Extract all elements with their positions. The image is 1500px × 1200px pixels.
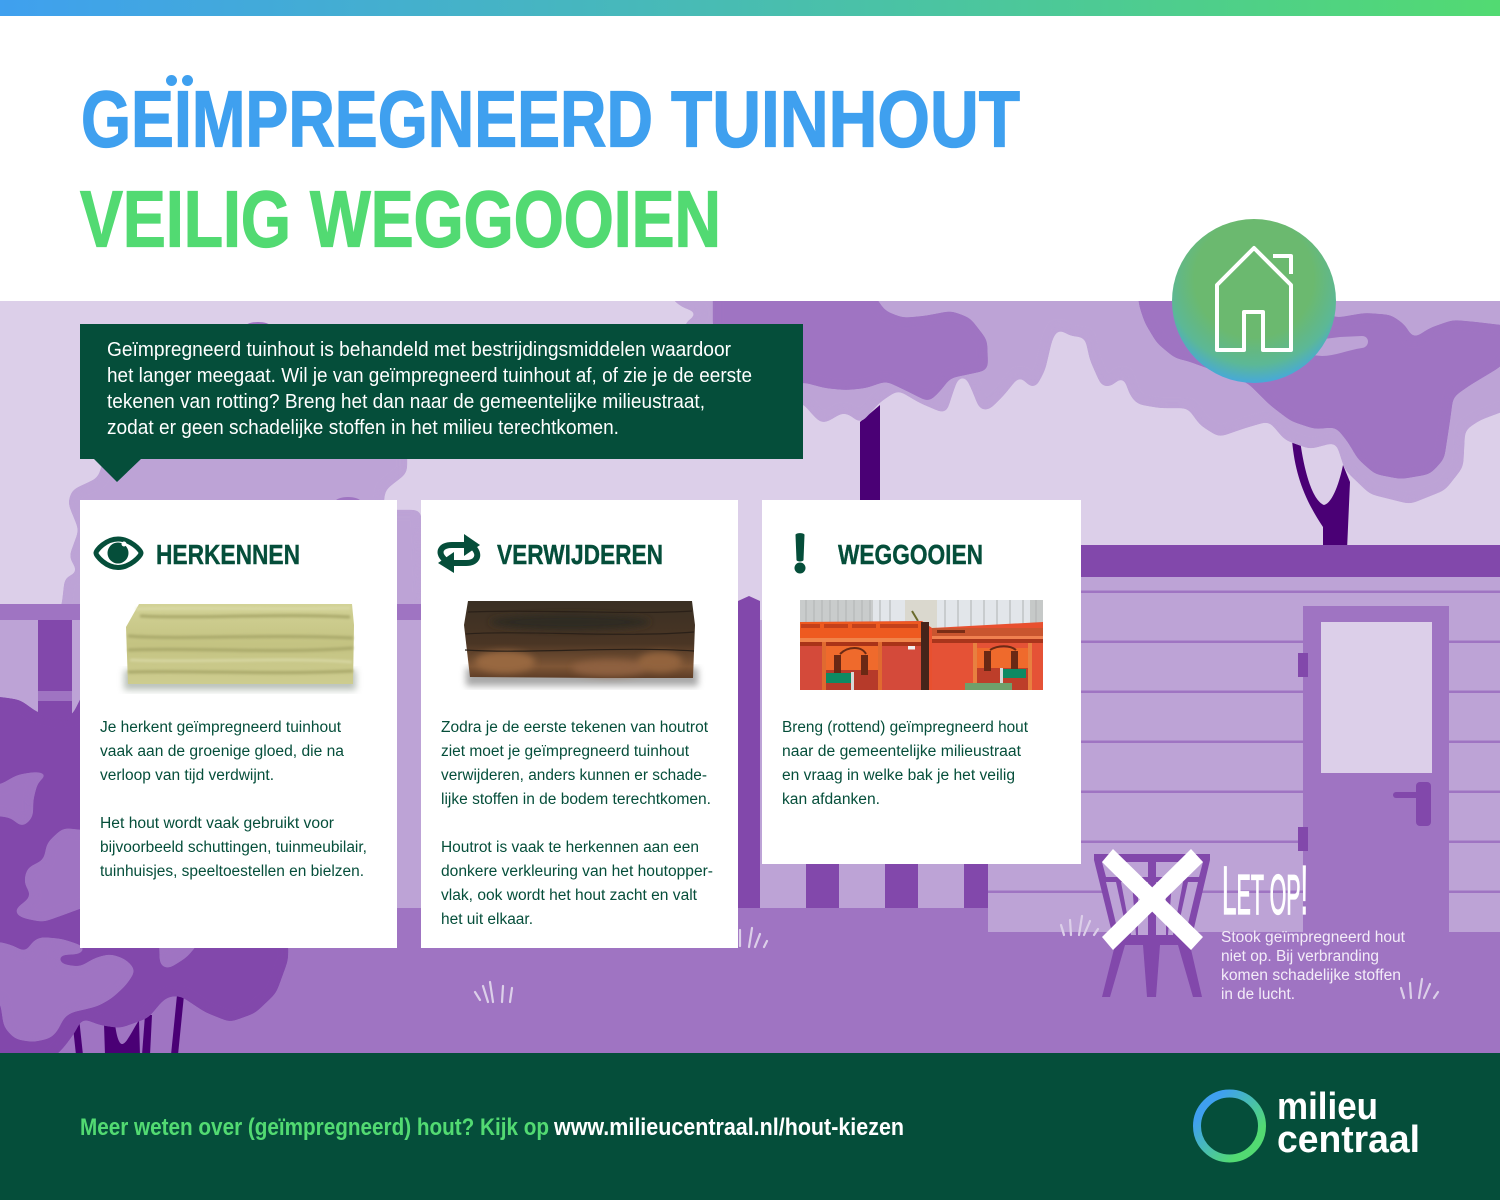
fence — [0, 596, 988, 910]
title: WEGGOOIEN — [310, 174, 721, 264]
intro callout: tekenen van rotting? Breng het dan naar de gemeentelijke milieustraat, — [107, 391, 705, 413]
footer call to action: Meer weten over (geïmpregneerd) hout? Kijk op — [80, 1114, 549, 1141]
body text: verloop van tijd verdwijnt. — [100, 767, 274, 784]
photo: rotten wood — [464, 601, 698, 686]
body text: Zodra je de eerste tekenen van houtrot — [441, 719, 709, 736]
intro callout: Geïmpregneerd tuinhout is behandeld met bestrijdingsmiddelen waardoor — [107, 339, 731, 361]
icon: eye — [96, 539, 141, 568]
intro callout: zodat er geen schadelijke stoffen in het milieu terechtkomen. — [107, 417, 619, 439]
bump behind intro box — [248, 322, 268, 324]
shed roof — [1081, 545, 1500, 577]
garden scene background — [0, 280, 1500, 1060]
panel: verwijderen — [421, 500, 738, 948]
warning text: Stook geïmpregneerd hout — [1221, 929, 1406, 946]
white cross over basket — [1102, 849, 1203, 950]
heading: VERWIJDEREN — [497, 539, 663, 570]
logo: centraal — [1277, 1119, 1420, 1161]
garden scene background: LET OP! — [1222, 851, 1308, 929]
body text: donkere verkleuring van het houtopper- — [441, 863, 713, 880]
body text: naar de gemeentelijke milieustraat — [782, 743, 1022, 760]
fire basket — [1094, 854, 1210, 997]
body text: Houtrot is vaak te herkennen aan een — [441, 839, 699, 856]
top gradient bar — [0, 0, 1500, 16]
body text — [782, 719, 1029, 808]
body text: vlak, ook wordt het hout zacht en valt — [441, 887, 698, 904]
background tree foliage — [50, 280, 1500, 640]
body text: lijke stoffen in de bodem terechtkomen. — [441, 791, 711, 808]
title — [80, 72, 1020, 264]
door — [1298, 606, 1449, 932]
grass tufts — [475, 916, 1438, 1002]
footer call to action: www.milieucentraal.nl/hout-kiezen — [553, 1114, 904, 1141]
icon: house — [1217, 248, 1291, 350]
footer — [0, 1053, 1500, 1200]
foreground tree trunks — [72, 995, 184, 1055]
body text: Het hout wordt vaak gebruikt voor — [100, 815, 334, 832]
body text: verwijderen, anders kunnen er schade- — [441, 767, 707, 784]
icon: exclamation mark — [794, 533, 806, 574]
intro callout — [80, 324, 803, 482]
photo: containers — [800, 600, 1043, 690]
body text: bijvoorbeeld schuttingen, tuinmeubilair, — [100, 839, 367, 856]
heading: HERKENNEN — [156, 539, 300, 570]
branch highlight in right tree — [1315, 336, 1368, 356]
panel: herkennen — [80, 500, 397, 948]
footer call to action — [80, 1114, 904, 1141]
body text: ziet moet je geïmpregneerd tuinhout — [441, 743, 690, 760]
panel: weggooien — [762, 500, 1081, 864]
body text: vaak aan de groenige gloed, die na — [100, 743, 344, 760]
foreground tree foliage — [0, 680, 288, 1060]
tree trunks in the background — [860, 405, 1350, 550]
warning text: niet op. Bij verbranding — [1221, 948, 1379, 965]
body text — [100, 719, 367, 880]
icon: repeat arrows — [438, 534, 480, 573]
intro callout: het langer meegaat. Wil je van geïmpregneerd tuinhout af, of zie je de eerste — [107, 365, 752, 387]
title: VEILIG — [80, 174, 291, 264]
body text: kan afdanken. — [782, 791, 880, 808]
photo: new green wood — [124, 604, 356, 690]
house badge — [1172, 219, 1336, 383]
body text: tuinhuisjes, speeltoestellen en bielzen. — [100, 863, 364, 880]
ground — [0, 908, 1500, 1053]
logo: milieu — [1277, 1086, 1378, 1128]
bump behind card — [336, 497, 360, 500]
body text: Breng (rottend) geïmpregneerd hout — [782, 719, 1029, 736]
warning text — [1221, 929, 1406, 1003]
body text: Je herkent geïmpregneerd tuinhout — [100, 719, 342, 736]
body text — [441, 719, 713, 928]
shed — [988, 545, 1500, 932]
title: TUINHOUT — [671, 74, 1020, 164]
logo — [1197, 1086, 1420, 1161]
body text: het uit elkaar. — [441, 911, 533, 928]
warning text: in de lucht. — [1221, 986, 1295, 1003]
warning text: komen schadelijke stoffen — [1221, 967, 1401, 984]
title: GEÏMPREGNEERD — [81, 74, 653, 164]
heading: WEGGOOIEN — [838, 539, 983, 570]
body text: en vraag in welke bak je het veilig — [782, 767, 1015, 784]
